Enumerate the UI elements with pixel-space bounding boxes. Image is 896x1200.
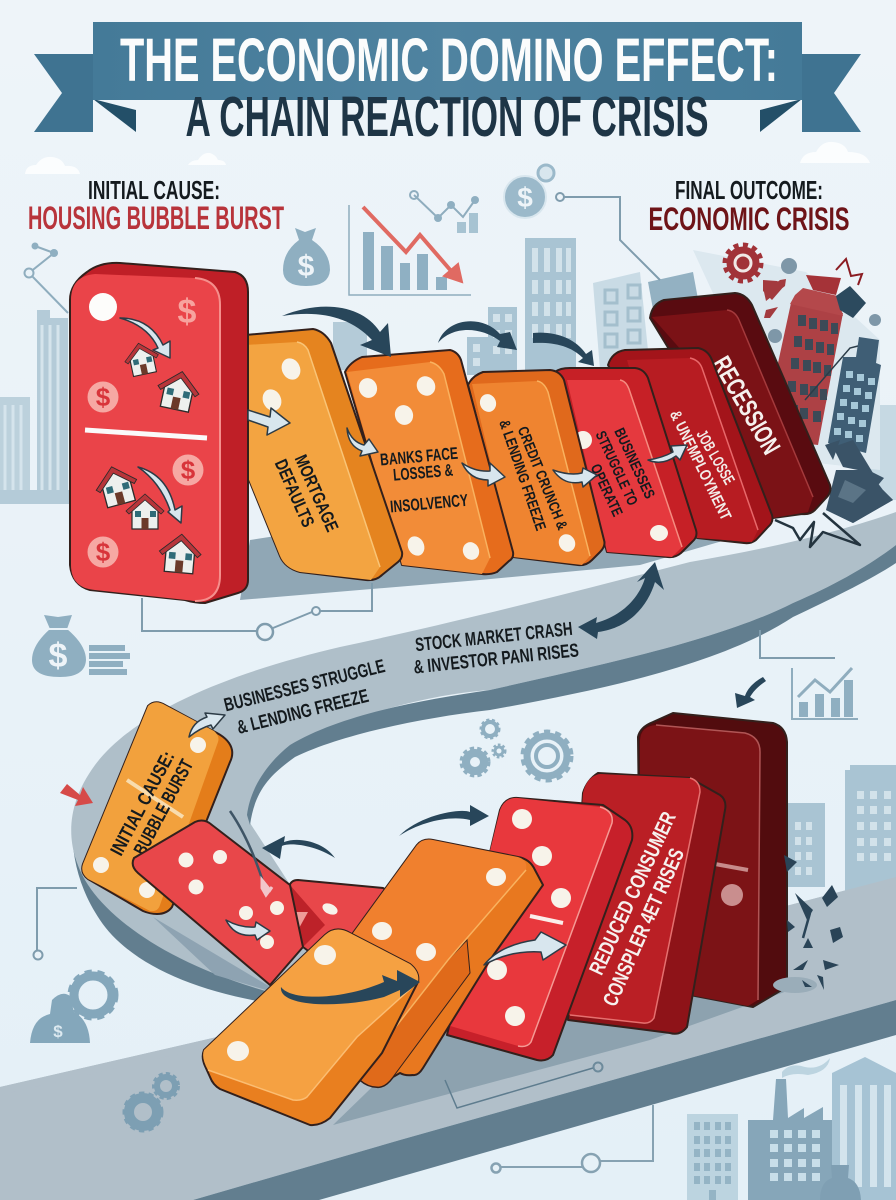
label: struggle to: STRUGGLE TO <box>592 429 641 508</box>
arrow: pale down <box>262 880 272 895</box>
pips <box>93 737 206 898</box>
label: losses: LOSSES & <box>392 461 454 485</box>
connector bottom <box>492 1105 653 1172</box>
label: conspler: CONSPLER 4ET RISES <box>599 845 689 1010</box>
heading: initial cause <box>28 175 284 236</box>
pips <box>487 809 571 1026</box>
domino 6: job loss <box>608 348 772 543</box>
building: columned <box>832 1057 896 1200</box>
label: recession: RECESSION <box>707 351 787 459</box>
dollars: $ <box>178 293 197 331</box>
connector lines top <box>24 193 660 313</box>
connector left lower <box>34 888 77 960</box>
label: job loss: JOB LOSSE <box>693 427 737 488</box>
domino 6b: red with pips <box>447 798 632 1060</box>
domino 3: banks <box>345 350 513 574</box>
icon: money bag and coin stack: $ <box>49 637 68 675</box>
arrow: light 5 <box>648 445 687 462</box>
arrow: double dark <box>578 562 664 639</box>
houses <box>122 340 162 378</box>
road label: stock market <box>410 618 580 679</box>
heading: final outcome <box>648 175 850 237</box>
icon: mini line chart <box>410 191 479 233</box>
arrow: dark 1 <box>282 307 391 357</box>
crisis scene <box>693 245 893 523</box>
arrows upper chain <box>248 307 766 708</box>
connector on road <box>445 1062 602 1108</box>
arrow: light on L6 <box>484 932 566 965</box>
dollars: $ <box>96 382 111 412</box>
skyline bottom right <box>687 1057 896 1200</box>
connector and chart icon right <box>760 630 858 719</box>
rubble on road and crack <box>775 470 893 547</box>
icon: person with money and gear <box>30 972 116 1043</box>
pip <box>721 884 743 906</box>
pips <box>178 850 284 949</box>
icon: rising chart <box>792 668 858 719</box>
domino 4: credit crunch <box>468 370 604 565</box>
chart: falling bars <box>349 205 471 295</box>
icon: gears mid <box>462 720 571 780</box>
domino L3: fallen red <box>289 880 420 975</box>
arrow: light 2 <box>347 428 378 456</box>
title banner <box>34 22 861 149</box>
arrow: dark 2 <box>438 321 517 350</box>
label: reduced consumer: REDUCED CONSUMER <box>585 808 681 979</box>
pips <box>227 945 336 1061</box>
icon: money bag top <box>283 228 330 286</box>
dollars: $ <box>181 455 196 485</box>
fold <box>360 940 470 1087</box>
divider <box>715 864 748 870</box>
domino 5: businesses struggle <box>555 368 696 557</box>
arrow: light 3 <box>462 463 505 486</box>
arrow: dark forward <box>399 805 489 836</box>
domino 8: dark back <box>638 713 787 1007</box>
label: operate: OPERATE <box>587 461 626 519</box>
arrow: thin dark <box>230 811 264 885</box>
label: businesses: BUSINESSES <box>610 425 658 501</box>
pips <box>356 373 482 563</box>
dollars: $ <box>96 537 111 567</box>
road label: stock market: STOCK MARKET CRASH <box>414 619 574 656</box>
arrow: light on red <box>226 920 270 940</box>
rubble <box>825 440 893 523</box>
road: lower road <box>0 877 896 1200</box>
icon: gears on road <box>125 1074 178 1130</box>
arrow: falling trend <box>363 207 462 282</box>
divider <box>85 430 207 438</box>
road label: businesses struggle <box>222 656 393 741</box>
label: housing bubble burst: HOUSING BUBBLE BURST <box>28 200 284 236</box>
arrow: light 1 <box>248 408 290 435</box>
building: factory <box>748 1079 832 1200</box>
domino 1: housing bubble burst <box>70 263 248 603</box>
icon: red gear <box>725 245 761 281</box>
label: defaults: DEFAULTS <box>271 456 318 530</box>
domino L1: initial cause <box>82 702 232 914</box>
debris lower right <box>773 855 843 993</box>
label: initial cause: INITIAL CAUSE: <box>107 748 179 859</box>
domino 2: mortgage defaults <box>245 329 402 580</box>
label: lending freeze: & LENDING FREEZE <box>495 418 549 533</box>
domino L4: big orange <box>340 840 543 1087</box>
icon: money bag top: $ <box>298 250 315 283</box>
road: upper winding road <box>71 470 896 1006</box>
icon: money bag and coin stack <box>32 615 130 677</box>
heading: final outcome: FINAL OUTCOME: <box>675 175 823 205</box>
pip <box>89 293 117 321</box>
label: mortgage: MORTGAGE <box>291 452 342 535</box>
pips <box>477 392 578 555</box>
arrow: light curved from L1 <box>189 713 225 737</box>
pips <box>259 355 304 414</box>
building: red collapsing <box>770 303 843 445</box>
icon: person with money and gear: $ <box>53 1022 63 1041</box>
domino L2: falling red <box>133 811 303 985</box>
divider <box>127 780 183 817</box>
domino L5: front orange <box>203 929 420 1125</box>
skyline upper <box>0 238 896 504</box>
icon: coins <box>504 165 554 218</box>
connector: below first domino <box>142 583 372 640</box>
arrow: red small <box>60 784 93 806</box>
arrow: light 4 <box>553 468 597 487</box>
road label: investor panic: & INVESTOR PANI RISES <box>413 640 580 679</box>
arrows on domino <box>120 318 170 358</box>
dollars <box>88 293 204 568</box>
skyline lower right <box>0 765 896 1095</box>
label: bubble burst: BUBBLE BURST <box>130 756 198 859</box>
clouds <box>25 142 870 174</box>
label: insolvency: INSOLVENCY <box>389 491 469 516</box>
road label: lending freeze: & LENDING FREEZE <box>235 686 371 739</box>
label: credit crunch: CREDIT CRUNCH & <box>514 424 571 533</box>
label: unemployment: & UNEMPLOYMENT <box>666 408 734 523</box>
divider <box>530 916 563 923</box>
arrow: dark on L5 <box>281 970 420 1004</box>
pips <box>574 431 668 541</box>
arrow: dark to lower chain <box>735 677 766 708</box>
pips <box>372 868 506 961</box>
domino 7: recession <box>650 293 830 518</box>
road label: businesses struggle: BUSINESSES STRUGGLE <box>222 656 387 716</box>
heading: initial cause: INITIAL CAUSE: <box>88 175 220 205</box>
icon: person silhouette <box>820 1165 861 1200</box>
arrow: dark back <box>262 836 335 859</box>
label: banks face: BANKS FACE <box>379 444 459 469</box>
building: dark blue tilted <box>828 337 881 453</box>
domino 7b: reduced consumer <box>568 773 725 1034</box>
arrow: dark 3 <box>533 333 594 366</box>
icon: coins: $ <box>517 182 533 213</box>
